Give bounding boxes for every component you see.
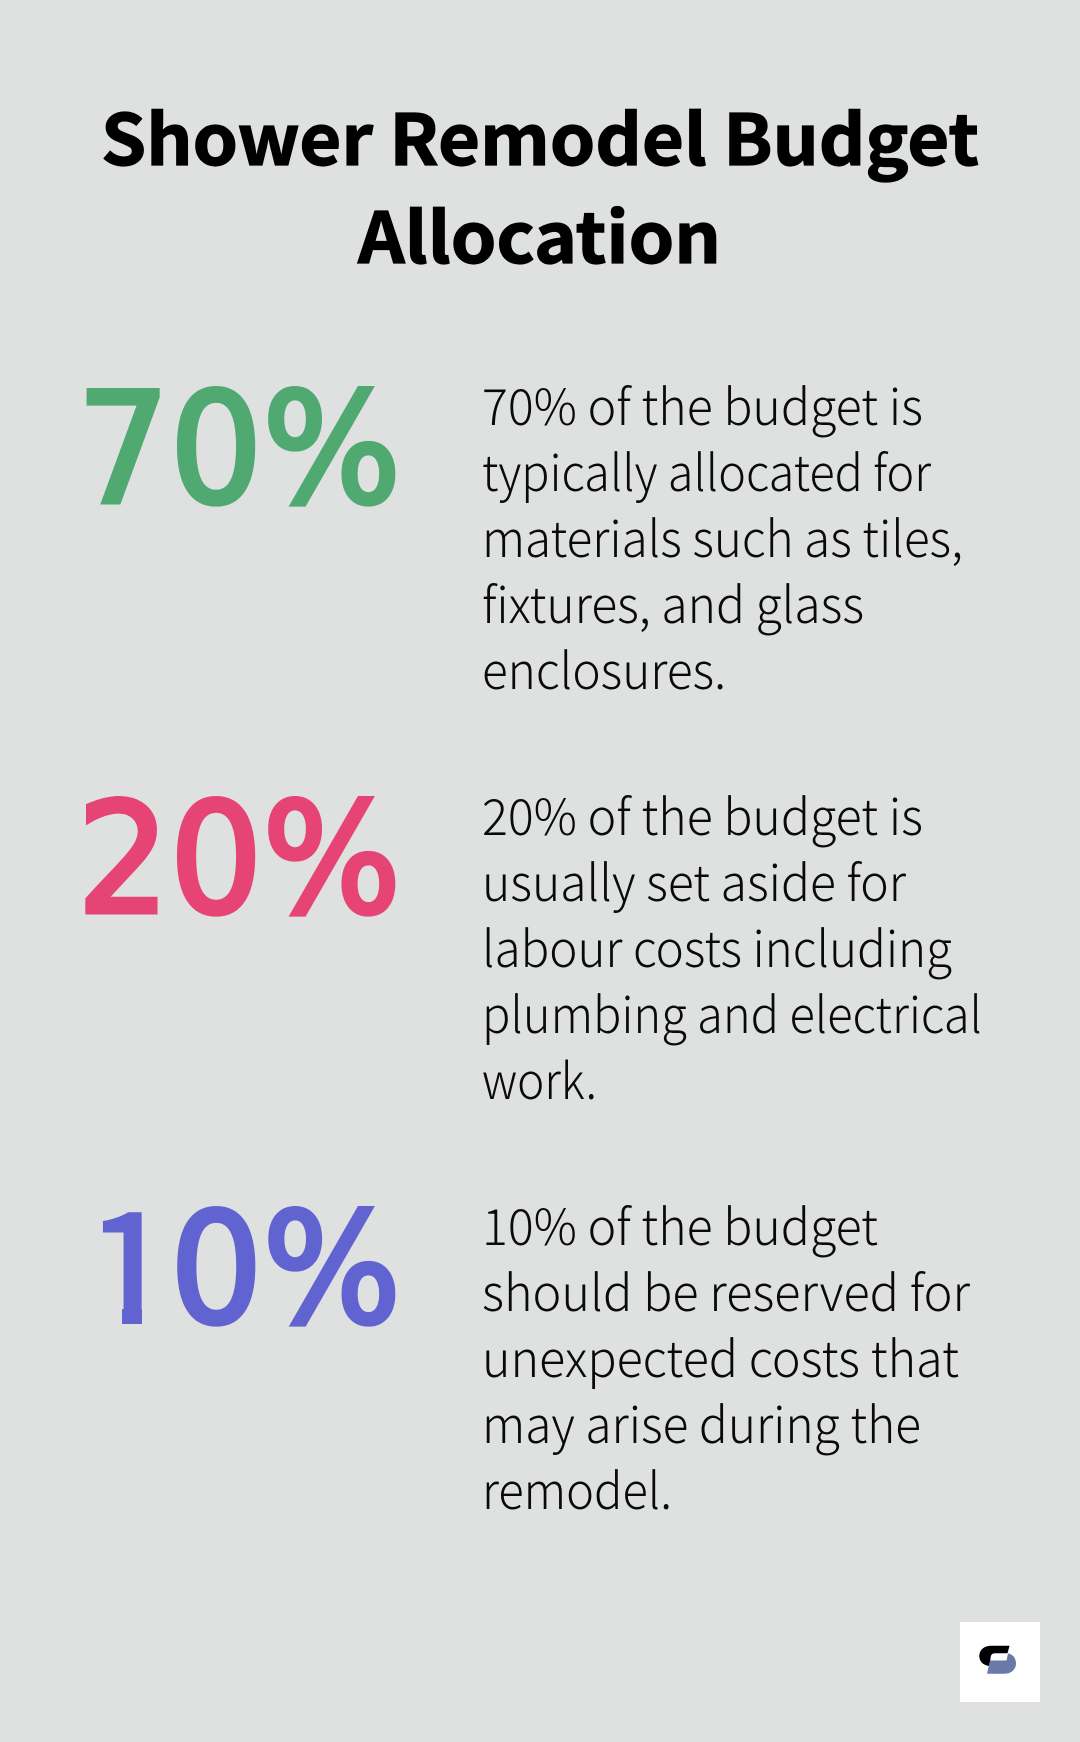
description: unexpected costs: unexpected costs that [482,1320,959,1392]
description: unexpected costs: should be reserved for [482,1254,971,1326]
description: labour [482,778,982,1114]
description: unexpected costs: 10% of the budget [482,1188,878,1260]
title: Shower Remodel Budget [101,85,979,186]
stat: 10%: 1 [85,1143,174,1369]
description: labour: usually set aside for [482,844,907,916]
description: labour: plumbing and electrical [482,976,982,1048]
title: Allocation [357,183,721,284]
description: materials: fixtures, and glass [482,566,864,638]
icon: logo black arc [979,1646,1010,1666]
stat: 20%: 20% [77,771,401,949]
description: unexpected costs [482,1188,971,1524]
description: materials: materials such as tiles, [482,500,963,572]
panel: materials 70% [77,361,963,704]
description: unexpected costs: remodel. [482,1452,672,1524]
logo badge [960,1622,1040,1702]
stat: 10%: 0% [170,1181,401,1359]
description: materials: typically allocated for [482,434,932,506]
description: unexpected costs: may arise during the [482,1386,921,1458]
description: labour: work. [482,1042,597,1114]
description: materials [482,368,963,704]
description: materials: 70% of the budget is [482,368,923,440]
panel: unexpected costs 10% [102,1205,970,1510]
description: labour: labour costs including [482,910,952,982]
icon: logo blue arc [987,1654,1016,1674]
description: materials: enclosures. [482,632,726,704]
title [101,85,979,284]
stat: 10% [102,1206,396,1327]
panel: labour 20% [77,771,982,1114]
stat: 70%: 70% [77,361,401,539]
description: labour: 20% of the budget is [482,778,923,850]
